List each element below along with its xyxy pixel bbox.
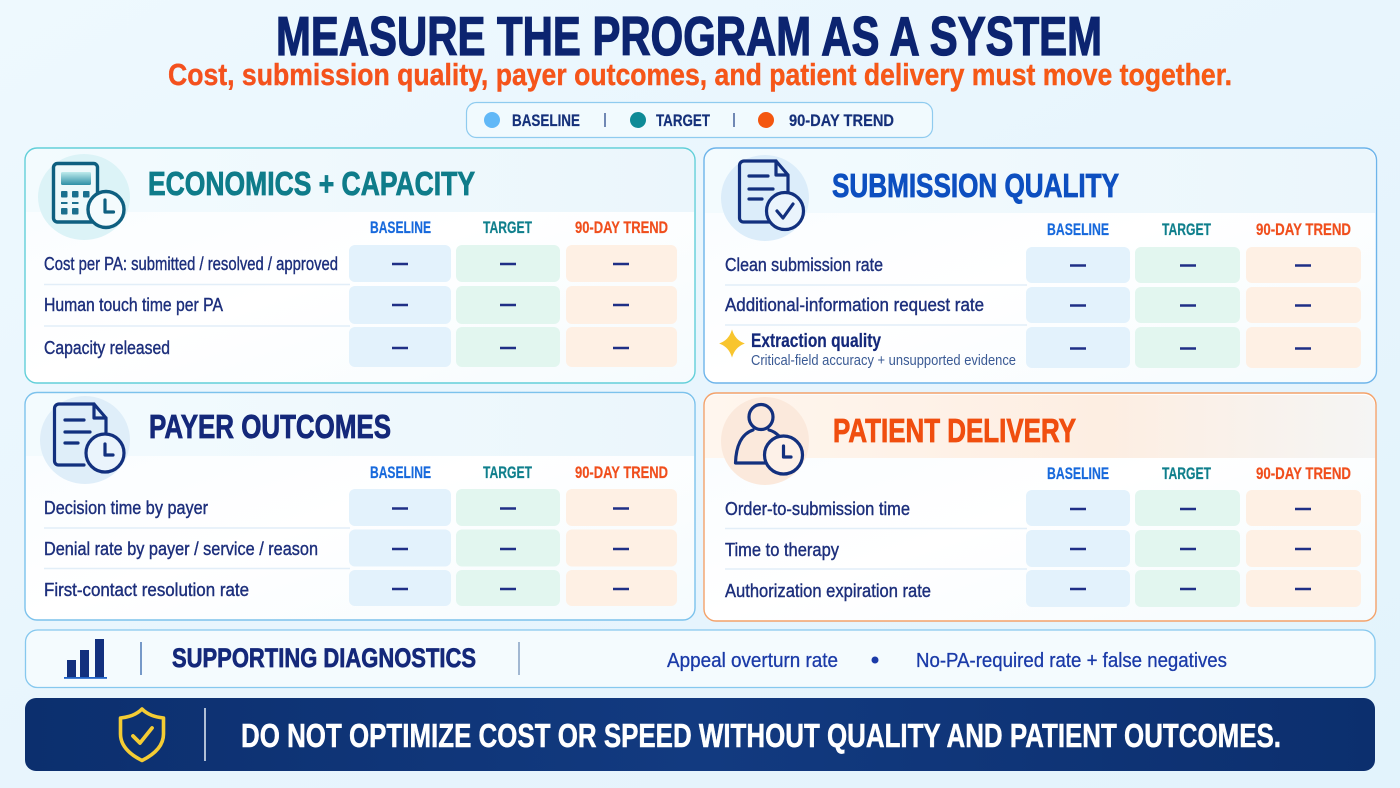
panel: payer outcomes <box>25 392 695 620</box>
row: capacity released <box>44 327 677 367</box>
column headers: BASELINE <box>370 219 431 237</box>
row: additional-information request rate <box>725 287 1361 323</box>
row: denial rate <box>44 530 677 566</box>
heading: PATIENT DELIVERY <box>833 412 1076 449</box>
heading: PAYER OUTCOMES <box>149 408 391 445</box>
column headers <box>1047 465 1351 483</box>
icon: gold star <box>720 331 744 356</box>
panel: submission quality <box>704 148 1376 383</box>
row: time to therapy <box>725 530 1361 567</box>
row: clean submission rate <box>725 247 1361 283</box>
column headers: TARGET <box>483 219 532 237</box>
diagnostic: no-PA-required rate: No-PA-required rate + false negatives <box>916 649 1227 672</box>
row: order-to-submission: Order-to-submission time <box>725 498 910 519</box>
legend: baseline <box>484 112 580 130</box>
icon: document with check <box>721 155 809 241</box>
banner: warning <box>25 698 1375 771</box>
row: denial rate: Denial rate by payer / service / reason <box>44 538 318 559</box>
heading: SUPPORTING DIAGNOSTICS <box>172 643 476 673</box>
icon: calculator and clock <box>38 154 130 240</box>
row: additional-information request rate: Additional-information request rate <box>725 294 984 315</box>
row: extraction quality: Extraction quality <box>751 331 881 352</box>
column headers: TARGET <box>483 464 532 482</box>
column headers: TARGET <box>1162 221 1211 239</box>
column headers: 90-DAY TREND <box>575 219 668 237</box>
row: decision time: Decision time by payer <box>44 497 208 518</box>
column headers: BASELINE <box>1047 465 1109 483</box>
column headers <box>1047 221 1351 239</box>
icon: bar chart <box>64 639 107 679</box>
column headers: TARGET <box>1162 465 1211 483</box>
row: authorization expiration: Authorization expiration rate <box>725 580 931 601</box>
row: first-contact resolution <box>44 570 677 606</box>
title: MEASURE THE PROGRAM AS A SYSTEM <box>276 5 1102 67</box>
column headers: BASELINE <box>1047 221 1109 239</box>
subtitle: Cost, submission quality, payer outcomes, and patient delivery must move together. <box>168 57 1232 92</box>
bullet <box>872 656 878 664</box>
row: cost per PA: Cost per PA: submitted / resolved / approved <box>44 253 338 274</box>
row: order-to-submission <box>725 490 1361 526</box>
column headers <box>370 219 668 237</box>
legend: target <box>630 112 710 130</box>
column headers: 90-DAY TREND <box>575 464 668 482</box>
panel: economics + capacity <box>25 148 695 383</box>
legend: 90-day trend: 90-DAY TREND <box>789 112 894 130</box>
column headers <box>370 464 668 482</box>
row: cost per PA <box>44 245 677 282</box>
column headers: BASELINE <box>370 464 431 482</box>
row: human touch time <box>44 286 677 324</box>
row: time to therapy: Time to therapy <box>725 539 840 560</box>
row: extraction quality: Critical-field accuracy + unsupported evidence <box>751 352 1016 369</box>
row: decision time <box>44 489 677 526</box>
panel: patient delivery <box>704 393 1376 621</box>
row: extraction quality <box>720 327 1361 369</box>
row: human touch time: Human touch time per PA <box>44 294 224 315</box>
icon: document with clock <box>40 396 130 484</box>
legend <box>466 102 932 138</box>
column headers: 90-DAY TREND <box>1256 221 1351 239</box>
heading: SUBMISSION QUALITY <box>832 167 1119 204</box>
diagnostic: appeal overturn rate: Appeal overturn rate <box>667 649 838 672</box>
row: first-contact resolution: First-contact resolution rate <box>44 579 249 600</box>
icon: shield with check <box>120 709 164 760</box>
column headers: 90-DAY TREND <box>1256 465 1351 483</box>
legend: baseline: BASELINE <box>512 112 580 130</box>
icon: person with clock <box>721 397 809 485</box>
heading: ECONOMICS + CAPACITY <box>148 165 475 202</box>
row: authorization expiration <box>725 570 1361 607</box>
row: clean submission rate: Clean submission rate <box>725 254 883 275</box>
panel: supporting diagnostics <box>26 630 1375 688</box>
legend: target: TARGET <box>656 112 710 130</box>
row: capacity released: Capacity released <box>44 337 170 358</box>
